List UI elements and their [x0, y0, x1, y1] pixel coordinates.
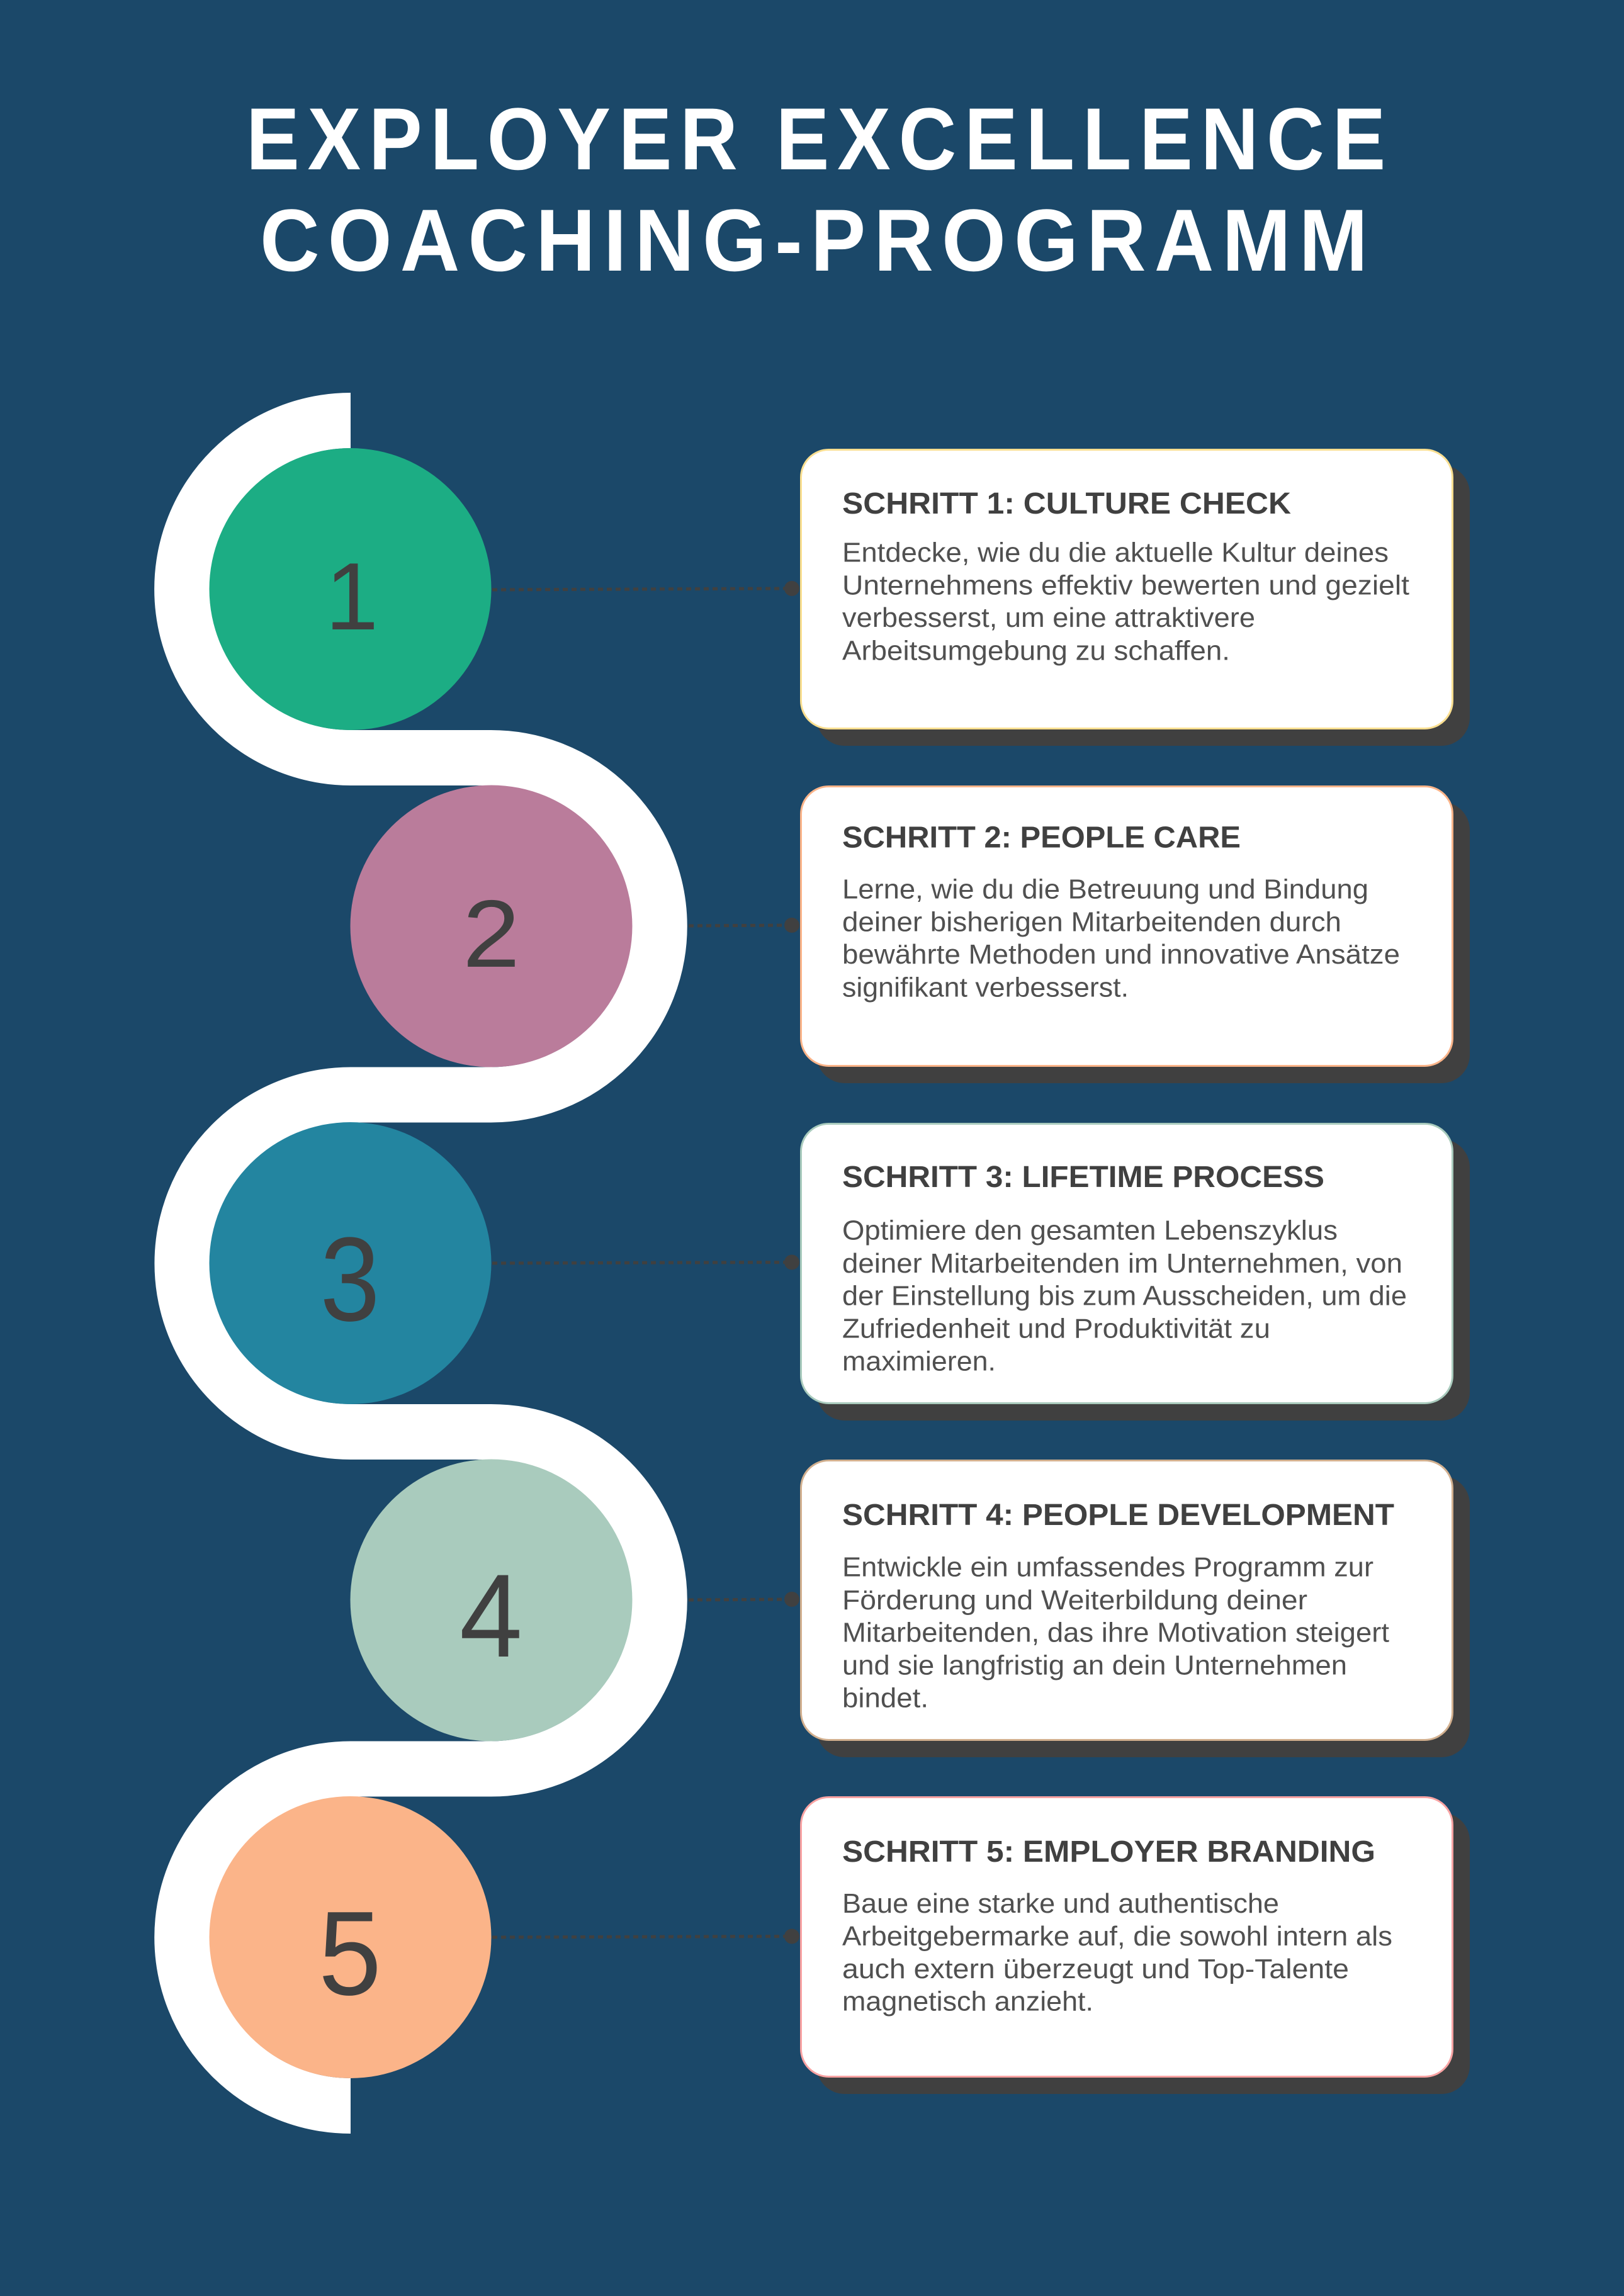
text: step 1 [842, 537, 1409, 666]
text: step 2 [842, 875, 1400, 1003]
text: step 2: deiner bisherigen Mitarbeitenden durch [842, 908, 1341, 938]
step 4 circle: 4 [460, 1550, 522, 1682]
heading: step 5: SCHRITT 5: EMPLOYER BRANDING [842, 1835, 1375, 1869]
panel: step 1 [801, 449, 1470, 746]
text: step 4: Förderung und Weiterbildung deiner [842, 1585, 1307, 1616]
text: step 3: maximieren. [842, 1347, 996, 1377]
text: step 3: Zufriedenheit und Produktivität zu [842, 1314, 1270, 1344]
text: step 5: magnetisch anzieht. [842, 1987, 1093, 2017]
text: step 3: der Einstellung bis zum Ausscheiden, um die [842, 1281, 1407, 1312]
heading: step 1: SCHRITT 1: CULTURE CHECK [842, 487, 1291, 521]
panel: step 3 [801, 1124, 1470, 1421]
connector 5 [492, 1928, 799, 1944]
text: step 5: Arbeitgebermarke auf, die sowohl intern als [842, 1922, 1392, 1952]
step 4 circle [350, 1459, 632, 1741]
heading: step 2: SCHRITT 2: PEOPLE CARE [842, 821, 1241, 855]
step 1 circle [209, 448, 491, 730]
heading: step 4: SCHRITT 4: PEOPLE DEVELOPMENT [842, 1499, 1394, 1532]
text: step 4: Entwickle ein umfassendes Programm zur [842, 1553, 1373, 1583]
step 2 circle: 2 [463, 881, 520, 988]
winding white path [182, 420, 660, 2106]
heading: step 3: SCHRITT 3: LIFETIME PROCESS [842, 1161, 1324, 1194]
step 5 circle: 5 [319, 1887, 381, 2020]
panel: step 4 [801, 1460, 1470, 1757]
step 3 circle [209, 1122, 491, 1404]
text: step 4: und sie langfristig an dein Unternehmen [842, 1650, 1347, 1680]
connector 4 [689, 1592, 799, 1607]
title: EXPLOYER EXCELLENCE [246, 89, 1394, 188]
text: step 2: Lerne, wie du die Betreuung und Bindung [842, 875, 1368, 905]
text: step 5: Baue eine starke und authentische [842, 1889, 1279, 1919]
title: COACHING-PROGRAMM [260, 191, 1376, 290]
connector 3 [492, 1255, 799, 1270]
text: step 1: Unternehmens effektiv bewerten und gezielt [842, 570, 1409, 600]
text: step 2: signifikant verbesserst. [842, 973, 1129, 1003]
panel: step 5 [801, 1798, 1470, 2094]
text: step 3: Optimiere den gesamten Lebenszyklus [842, 1216, 1338, 1246]
text: step 5: auch extern überzeugt und Top-Talente [842, 1954, 1349, 1984]
text: step 3: deiner Mitarbeitenden im Unternehmen, von [842, 1249, 1402, 1279]
connector 1 [492, 581, 799, 596]
step 3 circle: 3 [320, 1213, 380, 1346]
step 5 circle [209, 1796, 491, 2078]
panel: step 2 [801, 787, 1470, 1083]
connector 2 [689, 918, 799, 933]
title [246, 89, 1394, 290]
text: step 4 [842, 1553, 1389, 1714]
text: step 5 [842, 1889, 1392, 2017]
text: step 2: bewährte Methoden und innovative Ansätze [842, 940, 1400, 970]
text: step 1: verbesserst, um eine attraktivere [842, 603, 1255, 633]
text: step 3 [842, 1216, 1407, 1377]
step 1 circle: 1 [325, 543, 378, 650]
text: step 4: Mitarbeitenden, das ihre Motivation steigert [842, 1618, 1389, 1648]
text: step 1: Entdecke, wie du die aktuelle Kultur deines [842, 537, 1389, 568]
text: step 4: bindet. [842, 1684, 928, 1714]
step 2 circle [350, 785, 632, 1067]
text: step 1: Arbeitsumgebung zu schaffen. [842, 636, 1230, 666]
